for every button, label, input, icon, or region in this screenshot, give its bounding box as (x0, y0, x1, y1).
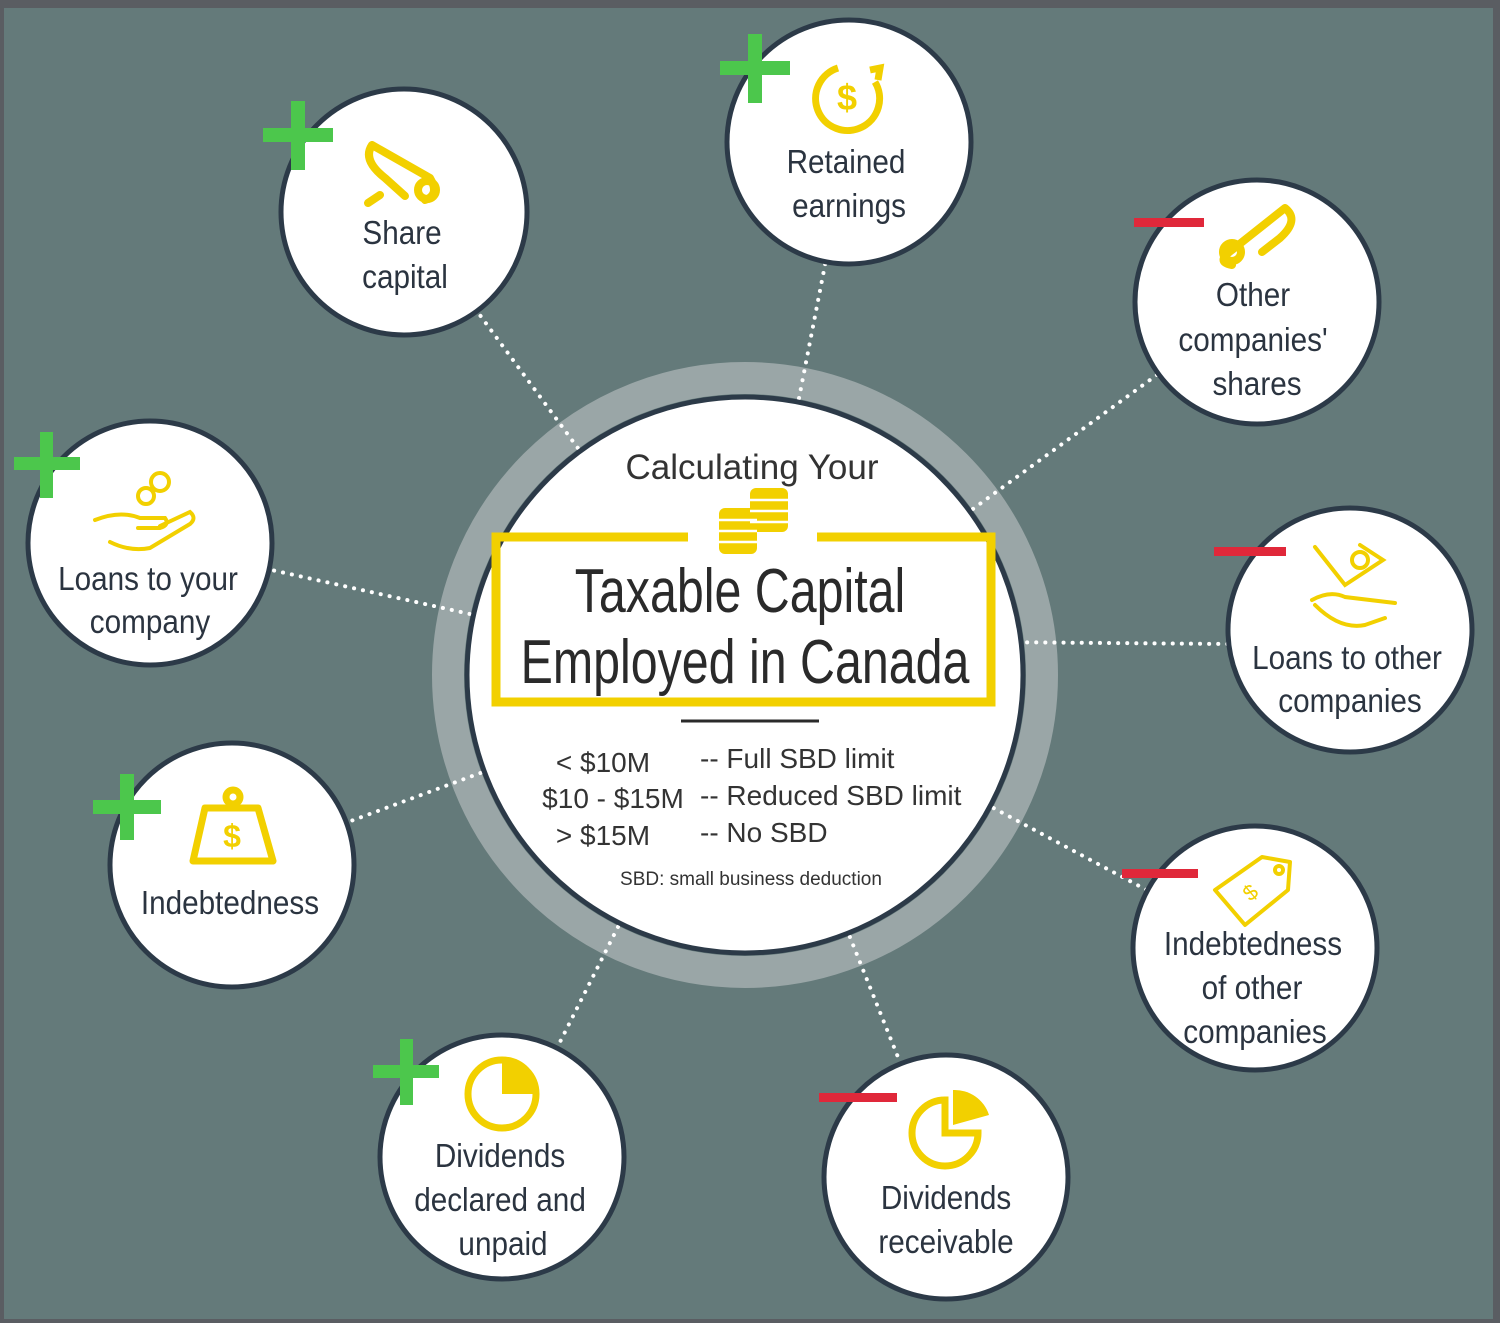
outer ring (448, 378, 1042, 972)
node: loans to your company (28, 421, 272, 665)
node: share capital: Share (362, 215, 442, 251)
central circle (467, 397, 1023, 953)
node: loans to your company: Loans to your (58, 561, 238, 597)
minus: loans to other companies (1214, 547, 1286, 556)
plus: share capital (263, 101, 333, 170)
node: indebtedness (110, 743, 354, 987)
node: dividends receivable: receivable (878, 1224, 1014, 1260)
title: Employed in Canada (521, 627, 969, 696)
footnote: SBD: small business deduction (620, 869, 882, 890)
node: other companies' shares: Other (1216, 277, 1290, 313)
SBD thresholds: -- Full SBD limit (700, 743, 895, 774)
node: indebtedness of other companies: of other (1202, 970, 1302, 1006)
node: loans to your company: company (90, 604, 211, 640)
SBD thresholds (542, 743, 962, 851)
node: other companies' shares: companies' (1178, 322, 1328, 358)
plus: retained earnings (720, 34, 790, 103)
SBD thresholds: < $10M (556, 747, 650, 778)
node: indebtedness of other companies: $ (1238, 879, 1263, 906)
icon: coins (719, 488, 788, 554)
minus: indebtedness of other companies (1122, 869, 1198, 878)
node: loans to other companies: companies (1278, 683, 1422, 719)
node: dividends receivable: Dividends (881, 1180, 1011, 1216)
node: other companies' shares: shares (1212, 366, 1302, 402)
node: dividends receivable (824, 1055, 1068, 1299)
dotted connectors (150, 142, 1350, 1177)
node: dividends declared and unpaid: Dividends (435, 1138, 565, 1174)
node: retained earnings: Retained (787, 144, 905, 180)
node: indebtedness of other companies: companies (1183, 1014, 1327, 1050)
heading: calculating your: Calculating Your (626, 448, 879, 487)
minus: other companies' shares (1134, 218, 1204, 227)
SBD thresholds: > $15M (556, 820, 650, 851)
minus: dividends receivable (819, 1093, 897, 1102)
title (521, 556, 969, 696)
node: share capital: capital (362, 259, 448, 295)
SBD thresholds: -- Reduced SBD limit (700, 780, 962, 811)
node: indebtedness of other companies: Indebtedness (1164, 926, 1342, 962)
title: Taxable Capital (575, 556, 905, 625)
node: indebtedness: Indebtedness (141, 885, 319, 921)
plus: loans to your company (14, 432, 80, 498)
node: retained earnings: earnings (792, 188, 906, 224)
node: other companies' shares (1135, 180, 1379, 424)
SBD thresholds: $10 - $15M (542, 783, 684, 814)
node: dividends declared and unpaid: declared and (414, 1182, 586, 1218)
node: indebtedness: $ (223, 818, 241, 854)
node: retained earnings (727, 20, 971, 264)
SBD thresholds: -- No SBD (700, 817, 828, 848)
node: dividends declared and unpaid: unpaid (458, 1226, 548, 1262)
node: loans to other companies: Loans to other (1252, 640, 1442, 676)
node: loans to other companies (1228, 508, 1472, 752)
plus: dividends declared (373, 1039, 439, 1105)
node: share capital (281, 89, 527, 335)
plus: indebtedness (93, 774, 161, 840)
node: dividends declared and unpaid (380, 1035, 624, 1279)
yellow title box (496, 537, 991, 702)
node: indebtedness of other companies (1133, 826, 1377, 1070)
node: retained earnings: $ (837, 77, 857, 118)
